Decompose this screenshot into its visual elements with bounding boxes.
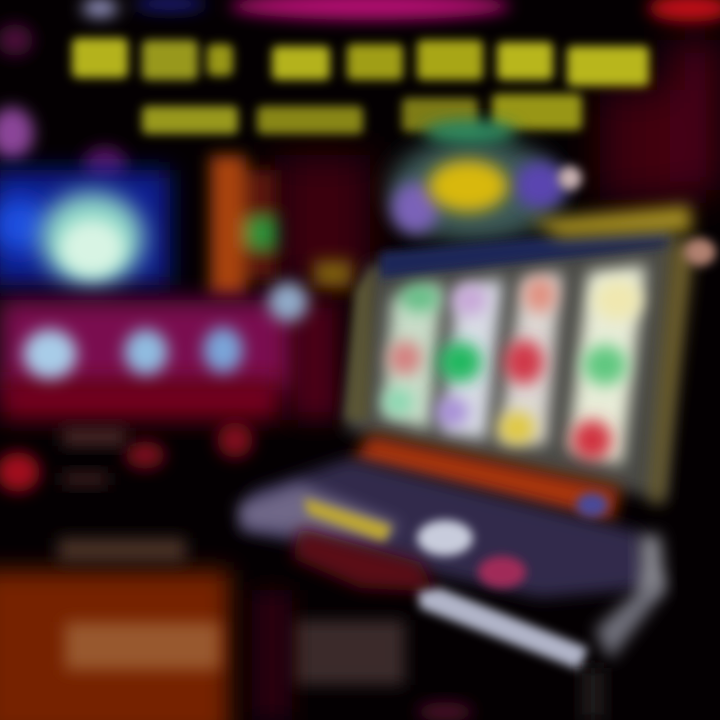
reel 1 [382, 283, 442, 430]
wooden floor panel with illegible caption [0, 538, 405, 720]
reel 2 [435, 278, 503, 440]
orange pillar [210, 155, 352, 295]
top ceiling lights [0, 0, 720, 183]
reel 3 [498, 272, 562, 445]
row of background machines [0, 282, 340, 492]
lower chrome tray [418, 588, 588, 670]
control deck [240, 458, 650, 598]
orange ledge below reels [352, 435, 620, 522]
title: illegible blurred yellow lettering [72, 38, 649, 134]
background: dark red curtains [275, 40, 720, 285]
wheel topper [390, 120, 582, 242]
main slot machine [238, 120, 716, 720]
reel 4 [568, 265, 646, 465]
cabinet frame [345, 235, 680, 500]
blue glowing screen at left [0, 170, 170, 285]
